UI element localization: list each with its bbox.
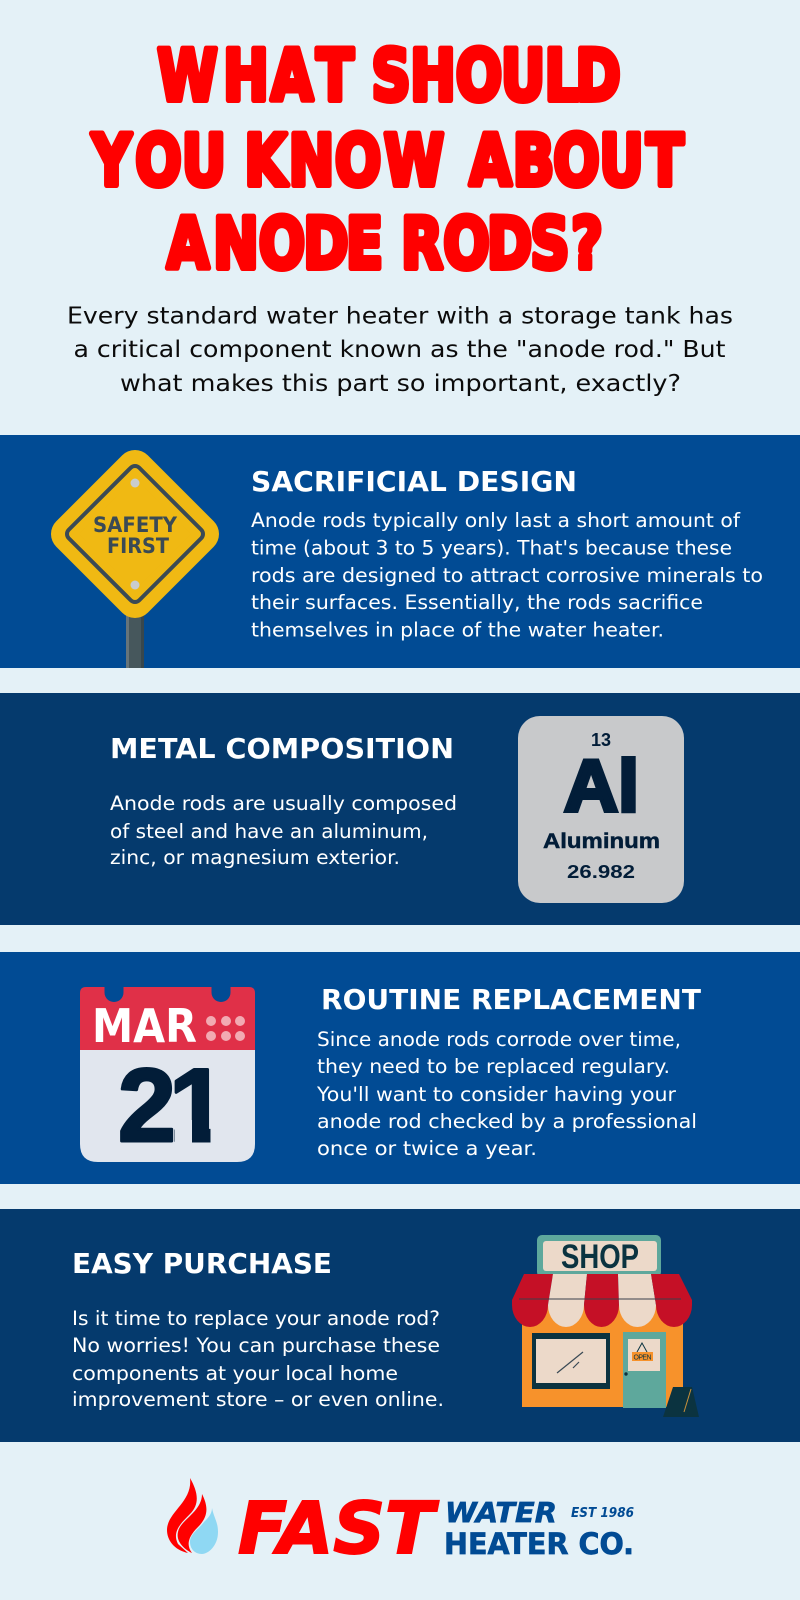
- title: ANODE RODS?: [167, 203, 603, 285]
- text block: sacrificial design: Anode rods typically only last a short amount of: [251, 509, 741, 532]
- intro text: [67, 304, 733, 397]
- icon: safety first sign: FIRST: [107, 534, 169, 559]
- text block: metal composition: Anode rods are usually composed: [110, 792, 457, 815]
- text block: metal composition: [110, 792, 457, 869]
- icon: shop storefront: SHOP: [561, 1238, 639, 1276]
- text block: routine replacement: [316, 1028, 697, 1160]
- intro text: what makes this part so important, exactly?: [120, 371, 681, 397]
- text block: sacrificial design: time (about 3 to 5 years). That's because these: [251, 536, 732, 560]
- icon: calendar: 21: [118, 1048, 227, 1164]
- icon: aluminum periodic tile: 13: [591, 730, 611, 750]
- wordmark: water heater co: WATER: [445, 1496, 557, 1529]
- icon: safety first sign: SAFETY: [93, 513, 177, 538]
- wordmark: water heater co: [444, 1496, 634, 1561]
- heading: metal composition: METAL COMPOSITION: [110, 733, 454, 765]
- text block: routine replacement: Since anode rods corrode over time,: [317, 1028, 681, 1051]
- icon: safety first sign: [69, 468, 201, 668]
- panel: metal composition: [0, 693, 800, 925]
- icon: shop storefront: OPEN: [634, 1354, 652, 1362]
- title: WHAT SHOULD: [157, 35, 621, 117]
- text block: metal composition: of steel and have an aluminum,: [110, 820, 428, 843]
- wordmark: FAST: FAST: [238, 1487, 440, 1570]
- wordmark: water heater co: EST 1986: [571, 1506, 634, 1521]
- title: [91, 35, 684, 285]
- icon: aluminum periodic tile: 26.982: [567, 862, 635, 882]
- icon: calendar: [80, 987, 255, 1164]
- panel: routine replacement: [0, 952, 800, 1184]
- text block: sacrificial design: themselves in place of the water heater.: [251, 618, 664, 642]
- text block: easy purchase: improvement store – or even online.: [72, 1388, 444, 1411]
- panel: sacrificial design: [0, 435, 800, 668]
- text block: routine replacement: they need to be replaced regulary.: [317, 1055, 670, 1078]
- text block: routine replacement: You'll want to consider having your: [316, 1083, 677, 1106]
- heading: sacrificial design: SACRIFICIAL DESIGN: [251, 466, 577, 498]
- intro text: Every standard water heater with a storage tank has: [67, 304, 733, 330]
- text block: sacrificial design: their surfaces. Essentially, the rods sacrifice: [251, 591, 703, 614]
- icon: shop storefront: [512, 1235, 699, 1417]
- icon: calendar: MAR: [92, 999, 197, 1053]
- text block: easy purchase: No worries! You can purchase these: [72, 1334, 440, 1357]
- icon: aluminum periodic tile: Aluminum: [543, 830, 660, 853]
- intro text: a critical component known as the "anode rod." But: [74, 337, 726, 363]
- text block: routine replacement: anode rod checked by a professional: [317, 1110, 697, 1133]
- text block: easy purchase: components at your local home: [72, 1362, 398, 1385]
- wordmark: water heater co: HEATER CO.: [444, 1527, 634, 1561]
- text block: sacrificial design: rods are designed to attract corrosive minerals to: [251, 564, 763, 587]
- logo: Fast Water Heater Co.: [167, 1478, 634, 1570]
- panel: easy purchase: [0, 1209, 800, 1442]
- title: YOU KNOW ABOUT: [91, 120, 684, 202]
- heading: routine replacement: ROUTINE REPLACEMENT: [321, 984, 701, 1016]
- text block: routine replacement: once or twice a year.: [317, 1137, 537, 1160]
- text block: sacrificial design: [251, 509, 763, 642]
- text block: metal composition: zinc, or magnesium exterior.: [110, 846, 400, 869]
- icon: flame: [167, 1478, 218, 1554]
- heading: easy purchase: EASY PURCHASE: [72, 1248, 332, 1280]
- text block: easy purchase: [72, 1307, 444, 1411]
- text block: easy purchase: Is it time to replace your anode rod?: [72, 1307, 440, 1330]
- icon: aluminum periodic tile: Al: [564, 746, 639, 827]
- icon: aluminum periodic tile: [518, 716, 684, 903]
